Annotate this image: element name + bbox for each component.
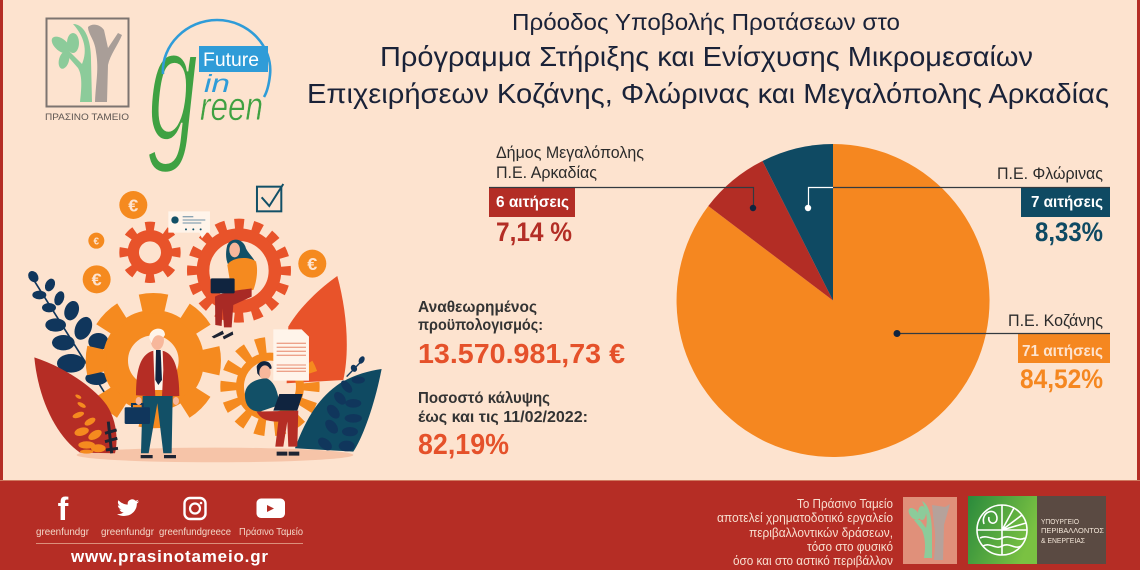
title	[307, 9, 1109, 109]
slice: Kozani	[677, 144, 990, 457]
ground shadow	[77, 448, 353, 462]
callout: Florina: 8,33%	[1035, 217, 1103, 247]
social: Instagram: greenfundgreece	[159, 527, 231, 538]
icon: document	[273, 329, 309, 381]
person: seated man with laptop	[245, 361, 303, 456]
text block: coverage: Ποσοστό κάλυψης	[418, 390, 550, 407]
slice: Arkadia	[708, 161, 833, 300]
slice: Florina	[762, 144, 833, 300]
person: standing man in red jacket	[125, 329, 179, 458]
logo: Future in Green: g	[148, 0, 198, 174]
gear: large orange	[96, 303, 211, 418]
callout: Arkadia: Δήμος Μεγαλόπολης	[496, 143, 644, 162]
social: Twitter	[101, 499, 155, 538]
callout: Florina	[805, 164, 1110, 247]
text block: revised budget: προϋπολογισμός:	[418, 317, 543, 334]
gear: large orange-red	[192, 224, 286, 317]
text block: about: περιβαλλοντικών δράσεων,	[749, 526, 893, 540]
logo: Prasino Tameio: ΠΡΑΣΙΝΟ ΤΑΜΕΙΟ	[45, 112, 129, 123]
plant: orange fern	[72, 394, 106, 454]
leaf: orange right	[287, 276, 347, 383]
text block: revised budget	[418, 299, 625, 369]
title: Επιχειρήσεων Κοζάνης, Φλώρινας και Μεγαλόπολης Αρκαδίας	[307, 78, 1109, 109]
logo: Future in Green: in	[204, 70, 230, 98]
icons: euro coins	[83, 191, 326, 293]
callout: Kozani: 71 αιτήσεις	[1022, 343, 1103, 360]
title: Πρόοδος Υποβολής Προτάσεων στο	[512, 9, 900, 35]
social: Facebook	[36, 491, 90, 538]
social: Facebook: greenfundgr	[36, 527, 90, 538]
callout: Kozani: 84,52%	[1020, 364, 1103, 394]
logo: Future in Green: Future	[203, 50, 259, 71]
logo: Future in Green: reen	[200, 85, 263, 129]
callout: Arkadia: Π.Ε. Αρκαδίας	[496, 163, 597, 182]
illustration: gears and business people	[26, 184, 382, 462]
social: YouTube	[239, 498, 303, 538]
social: Instagram	[159, 498, 231, 538]
icon: checkbox	[257, 184, 283, 211]
person: woman with laptop	[211, 240, 257, 339]
callout: Florina: Π.Ε. Φλώρινας	[997, 164, 1103, 183]
logo: Ministry of Environment: & ΕΝΕΡΓΕΙΑΣ	[1041, 536, 1085, 545]
text block: revised budget: Αναθεωρημένος	[418, 299, 537, 316]
icons: euro coins: €	[92, 270, 102, 290]
footer	[0, 480, 1140, 570]
callout: Arkadia	[489, 143, 756, 247]
text block: coverage	[418, 390, 588, 461]
text block: coverage: έως και τις 11/02/2022:	[418, 409, 588, 426]
text block: about	[717, 497, 893, 568]
icons: euro coins: €	[94, 236, 100, 247]
logo: Ministry of Environment	[968, 496, 1106, 564]
gear: medium orange	[228, 345, 312, 428]
social: YouTube: Πράσινο Ταμείο	[239, 526, 303, 538]
plant: dark fern	[105, 422, 118, 453]
gear: small orange-red	[124, 226, 176, 278]
callout: Florina: 7 αιτήσεις	[1031, 194, 1103, 211]
text block: about: αποτελεί χρηματοδοτικό εργαλείο	[717, 511, 893, 525]
text block: about: όσο και στο αστικό περιβάλλον	[733, 554, 893, 568]
leaf: dark teal right	[295, 369, 382, 452]
plant: navy sprig	[26, 269, 108, 393]
icons: euro coins: €	[128, 195, 138, 215]
logo: Ministry of Environment: ΠΕΡΙΒΑΛΛΟΝΤΟΣ	[1041, 526, 1104, 535]
logo: Prasino Tameio	[45, 18, 129, 123]
icons: euro coins: €	[307, 254, 317, 274]
social: Twitter: greenfundgr	[101, 527, 155, 538]
text block: revised budget: 13.570.981,73 €	[418, 338, 625, 369]
logo: Ministry of Environment: ΥΠΟΥΡΓΕΙΟ	[1041, 517, 1079, 526]
callout: Arkadia: 6 αιτήσεις	[496, 194, 569, 211]
pie chart	[677, 144, 990, 457]
text block: about: Το Πράσινο Ταμείο	[797, 497, 893, 511]
callout: Kozani	[894, 311, 1110, 394]
callout: Kozani: Π.Ε. Κοζάνης	[1008, 311, 1103, 330]
social: Facebook: f	[58, 491, 69, 527]
text block: coverage: 82,19%	[418, 429, 509, 461]
website: www.prasinotameio.gr	[70, 547, 268, 566]
icon: speech bubble	[168, 211, 210, 238]
plant: leaf pattern	[316, 355, 366, 453]
text block: about: τόσο στο φυσικό	[807, 540, 893, 554]
callout: Arkadia: 7,14 %	[496, 217, 572, 247]
leaf: crimson left	[34, 357, 117, 453]
logo: Prasino Tameio footer	[903, 497, 957, 564]
title: Πρόγραμμα Στήριξης και Ενίσχυσης Μικρομεσαίων	[380, 41, 1033, 72]
